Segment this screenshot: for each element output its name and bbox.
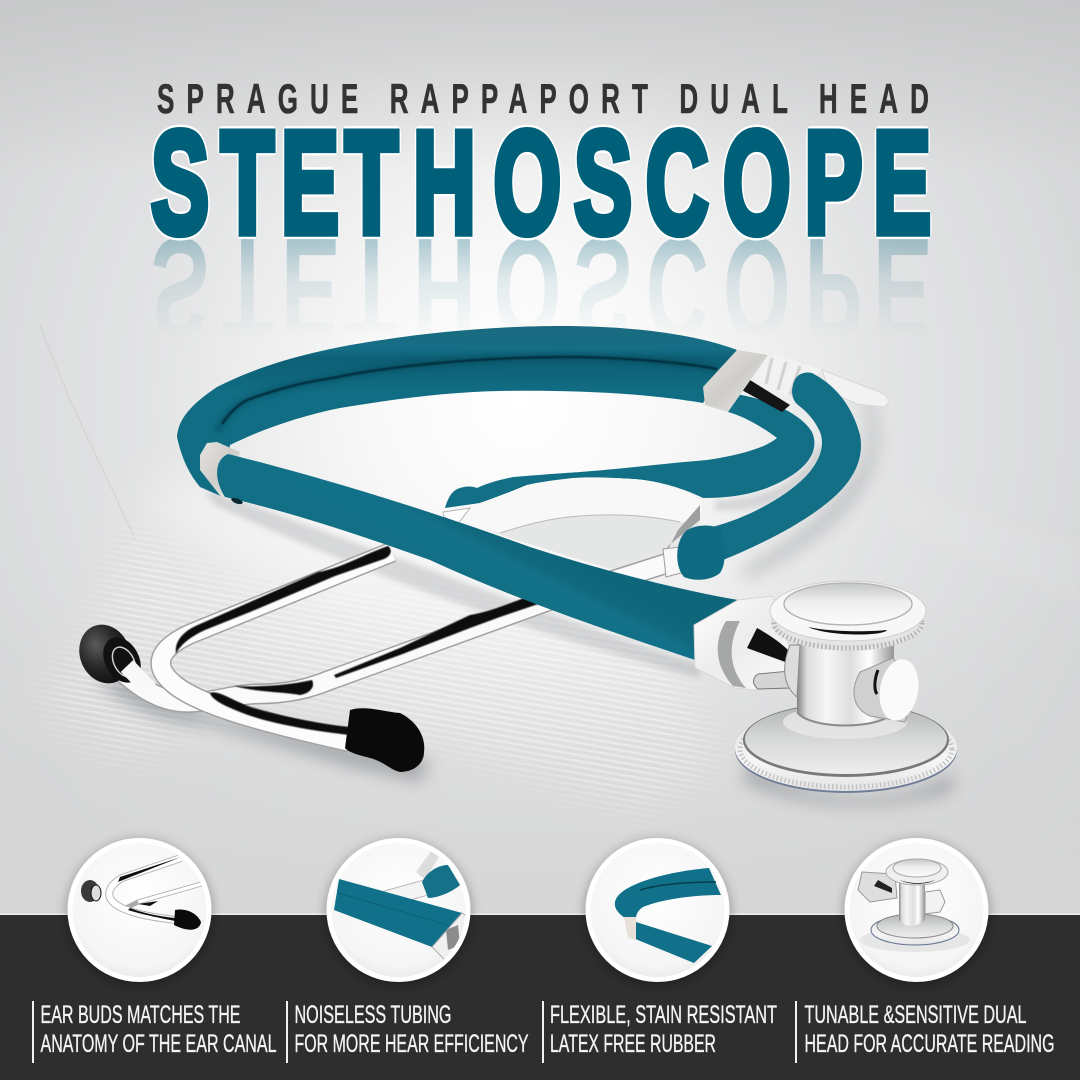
front tube	[217, 454, 738, 660]
feature caption 3	[542, 1001, 777, 1063]
metal tab	[822, 370, 888, 407]
feature caption 4	[795, 1001, 1054, 1063]
groove in arc	[217, 357, 717, 432]
chest piece	[694, 581, 957, 793]
stethoscope photo illustration	[71, 326, 957, 805]
arm 1 reflections	[176, 546, 391, 735]
ear bud right	[345, 708, 424, 772]
feature 2 thumbnail: tubing	[326, 838, 472, 982]
feature caption 3: LATEX FREE RUBBER	[550, 1030, 716, 1058]
metal spring coil	[738, 354, 822, 412]
tube 3 outer right	[712, 372, 861, 560]
feature caption 2	[286, 1001, 529, 1063]
ear bud left	[71, 617, 150, 691]
dark footer band	[0, 914, 1080, 1080]
clip left	[200, 442, 240, 500]
chrome stub into cap	[663, 546, 692, 577]
teal end cap	[677, 526, 725, 580]
feature caption 1	[32, 1001, 277, 1063]
chrome arm 2	[113, 556, 690, 702]
cast shadows	[95, 400, 955, 805]
feature 4 thumbnail: dual head	[844, 838, 988, 982]
side knob	[854, 656, 923, 724]
connector	[694, 596, 790, 690]
base disc	[735, 703, 957, 793]
reflection of title: STETHOSCOPE	[151, 207, 931, 369]
title: STETHOSCOPE	[151, 103, 931, 264]
tube 2 inner loop	[445, 393, 814, 508]
title: STETHOSCOPE	[151, 103, 931, 264]
front tube hole	[231, 497, 243, 505]
heading: product line: SPRAGUE RAPPAPORT DUAL HEAD	[157, 76, 929, 123]
feature caption 1: EAR BUDS MATCHES THE	[40, 1001, 240, 1029]
head top with glass	[770, 581, 926, 651]
feature caption 2: NOISELESS TUBING	[294, 1001, 452, 1029]
chrome yoke plate	[443, 478, 703, 572]
feature caption 1: ANATOMY OF THE EAR CANAL	[40, 1030, 277, 1058]
stem	[785, 640, 894, 726]
feature 1 thumbnail: ear buds	[68, 838, 212, 982]
top arc tubes	[177, 326, 737, 497]
arm 2 reflections	[234, 594, 550, 695]
background wave pattern	[40, 325, 704, 800]
feature caption 2: FOR MORE HEAR EFFICIENCY	[294, 1030, 529, 1058]
clip on arc	[703, 350, 768, 412]
chrome arm 1	[161, 552, 392, 742]
feature 3 thumbnail: flexible rubber	[586, 838, 730, 982]
feature caption 3: FLEXIBLE, STAIN RESISTANT	[550, 1001, 777, 1029]
